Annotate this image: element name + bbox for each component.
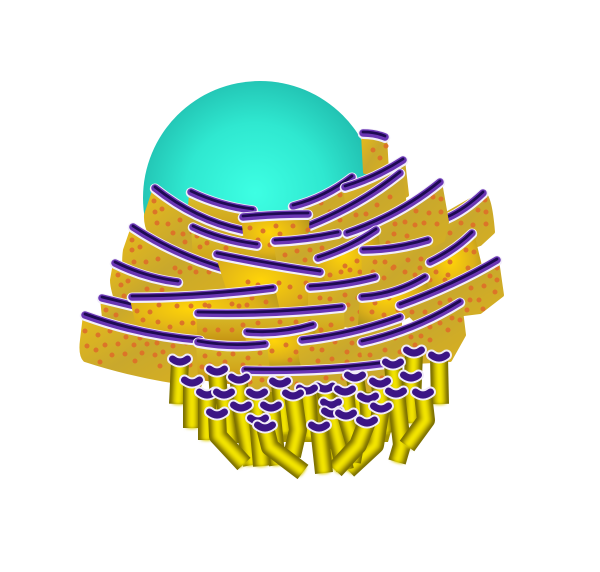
cisterna: centre small front — [247, 324, 315, 365]
cisterna: base long — [245, 362, 388, 398]
tube 1 — [172, 359, 188, 404]
cisterna: back upper — [189, 191, 253, 240]
cisterna: centre lower — [310, 276, 385, 330]
tube 24 — [264, 405, 278, 465]
tube 18 — [250, 392, 264, 443]
tube 32 — [312, 425, 326, 473]
cisterna: upper inner left — [193, 226, 258, 275]
tube 30 — [335, 420, 374, 470]
vesicle tubes — [172, 350, 446, 473]
tube 13 — [300, 388, 314, 438]
cisterna: wide upper right — [347, 181, 447, 270]
tube 31 — [258, 425, 303, 472]
tube 11 — [372, 381, 388, 433]
cisterna: large left — [124, 226, 228, 298]
cisterna: large front left — [81, 314, 200, 385]
tube 17 — [216, 392, 232, 444]
cisterna: middle band — [275, 232, 338, 270]
tube 22 — [324, 402, 338, 448]
tube 27 — [210, 412, 244, 464]
cisterna: centre right front — [301, 316, 400, 375]
tube 21 — [360, 396, 376, 448]
tube 14 — [338, 389, 352, 438]
cisterna: far right — [427, 192, 493, 262]
tube 2 — [406, 350, 422, 403]
cisterna: back centre — [293, 176, 352, 232]
cisterna: top centre — [243, 213, 308, 259]
tube 16 — [200, 392, 214, 440]
tube 25 — [348, 406, 388, 470]
tube 10 — [272, 381, 288, 433]
cisterna: far right front — [400, 259, 502, 320]
cisterna: central yellow — [217, 253, 328, 320]
cisterna: left stub — [102, 297, 135, 325]
cisterna: upper middle — [310, 172, 405, 262]
tube 15 — [388, 391, 404, 462]
cisterna: centre tilted — [318, 229, 380, 292]
nucleus sphere — [143, 81, 377, 315]
tube 28 — [338, 413, 355, 462]
cisterna: back right — [345, 159, 407, 225]
golgi stack of cisternae — [81, 132, 502, 398]
tube 7 — [184, 380, 200, 428]
cisterna: right inner — [430, 232, 482, 300]
tube 19 — [286, 393, 300, 456]
tube 26 — [324, 411, 345, 470]
cisterna: back top right — [363, 132, 387, 172]
cisterna: top left — [146, 187, 245, 265]
cisterna: long left band — [132, 287, 280, 340]
tube 8 — [348, 375, 365, 443]
cisterna: left small — [112, 262, 180, 310]
cisterna: right front long — [362, 301, 464, 365]
cisterna: middle long band — [198, 306, 343, 345]
tube 20 — [407, 392, 430, 446]
tube 12 — [318, 386, 337, 466]
tube 4 — [386, 362, 400, 408]
tube 5 — [210, 369, 224, 440]
tube 9 — [404, 375, 418, 423]
cisterna: left front small — [198, 341, 268, 385]
tube 29 — [250, 418, 266, 466]
tube backing mass — [215, 392, 402, 442]
tube 6 — [232, 377, 246, 418]
tube 23 — [234, 405, 252, 465]
tube 3 — [432, 355, 446, 404]
cisterna: right lower small — [360, 276, 428, 325]
cisterna: centre right band — [363, 239, 432, 302]
